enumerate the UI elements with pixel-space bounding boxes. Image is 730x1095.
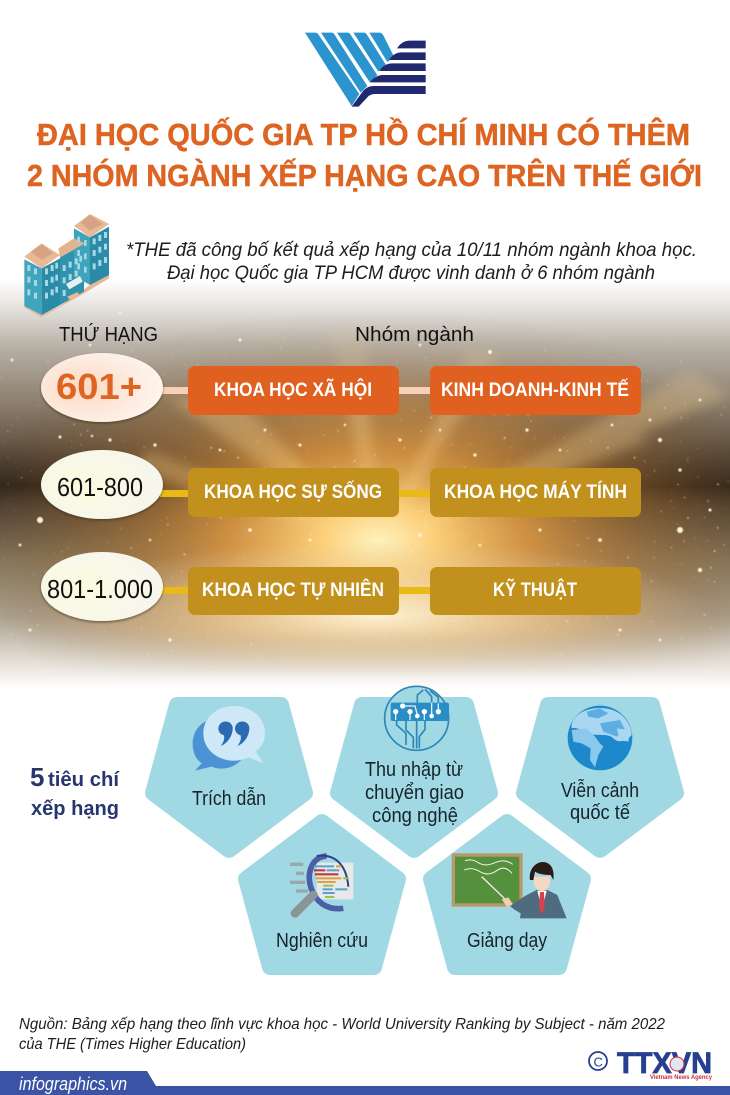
logo: TTXVN: C	[594, 1054, 603, 1070]
label: Giảng dạy	[467, 930, 547, 952]
label	[561, 779, 639, 824]
box: Khoa học sự sống: KHOA HỌC SỰ SỐNG	[204, 481, 382, 503]
logo: TTXVN: TTXVN	[617, 1047, 712, 1080]
source note	[19, 1016, 665, 1053]
panel: citations	[153, 705, 305, 850]
column headings: Nhóm ngành	[355, 324, 474, 346]
box: Khoa học xã hội: KHOA HỌC XÃ HỘI	[214, 379, 372, 401]
column headings: THỨ HẠNG	[59, 323, 158, 346]
rank badge 801-1.000: 801-1.000	[47, 574, 153, 604]
icon: globe	[568, 706, 632, 770]
logo: university emblem	[305, 33, 426, 107]
icon: building	[24, 214, 109, 317]
panel: international outlook	[524, 705, 676, 850]
rank badge 801-1.000	[41, 552, 163, 621]
intro text: *THE đã công bố kết quả xếp hạng của 10/11 nhóm ngành khoa học.	[126, 240, 697, 261]
rank badge 601-800	[41, 450, 163, 519]
rank badge 601-800: 601-800	[57, 472, 143, 502]
label: Trích dẫn	[192, 787, 266, 810]
source note: Nguồn: Bảng xếp hạng theo lĩnh vực khoa học - World University Ranking by Subject - năm 2022	[19, 1016, 665, 1033]
heading: 5 criteria: xếp hạng	[31, 798, 119, 820]
footer bar	[0, 1071, 730, 1095]
background: golden sparkle photo	[0, 280, 730, 692]
heading: 5 criteria	[30, 762, 120, 820]
label: chuyển giao	[365, 782, 464, 804]
footer bar: infographics.vn	[19, 1074, 127, 1094]
box: Khoa học xã hội	[188, 366, 399, 415]
icon: speech bubbles	[193, 706, 265, 771]
box: Kinh doanh-kinh tế: KINH DOANH-KINH TẾ	[441, 379, 629, 401]
panel: teaching	[431, 822, 583, 967]
connectors row 1	[160, 387, 432, 394]
box: Khoa học máy tính: KHOA HỌC MÁY TÍNH	[444, 481, 627, 503]
rank badge 601+	[41, 353, 163, 422]
title: ĐẠI HỌC QUỐC GIA TP HỒ CHÍ MINH CÓ THÊM	[37, 116, 690, 152]
icon: circuit globe	[385, 686, 449, 750]
rank badge 601+: 601+	[56, 366, 142, 407]
label: Viễn cảnh	[561, 779, 639, 802]
heading: 5 criteria: tiêu chí	[48, 769, 120, 791]
intro text	[126, 240, 697, 284]
connectors row 3	[160, 587, 432, 594]
column headings	[59, 323, 474, 346]
label	[365, 759, 464, 827]
connectors row 2	[160, 490, 432, 497]
label: Thu nhập từ	[365, 759, 463, 781]
intro text: Đại học Quốc gia TP HCM được vinh danh ở 6 nhóm ngành	[167, 263, 655, 284]
title	[27, 116, 702, 193]
label: quốc tế	[570, 802, 630, 824]
box: Khoa học tự nhiên	[188, 567, 399, 615]
box: Khoa học sự sống	[188, 468, 399, 517]
box: Khoa học máy tính	[430, 468, 641, 517]
source note: của THE (Times Higher Education)	[19, 1036, 246, 1053]
panel: research	[246, 822, 398, 967]
icon: teacher at blackboard	[452, 853, 567, 918]
box: Kinh doanh-kinh tế	[430, 366, 641, 415]
box: Kỹ thuật	[430, 567, 641, 615]
heading: 5 criteria: 5	[30, 762, 44, 792]
logo: TTXVN: Vietnam News Agency	[650, 1074, 712, 1081]
box: Khoa học tự nhiên: KHOA HỌC TỰ NHIÊN	[202, 579, 384, 601]
panel: technology transfer income	[338, 686, 490, 850]
label: công nghệ	[372, 805, 458, 827]
label: Nghiên cứu	[276, 930, 368, 952]
icon: magnifier over code	[290, 856, 353, 913]
box: Kỹ thuật: KỸ THUẬT	[493, 579, 577, 601]
